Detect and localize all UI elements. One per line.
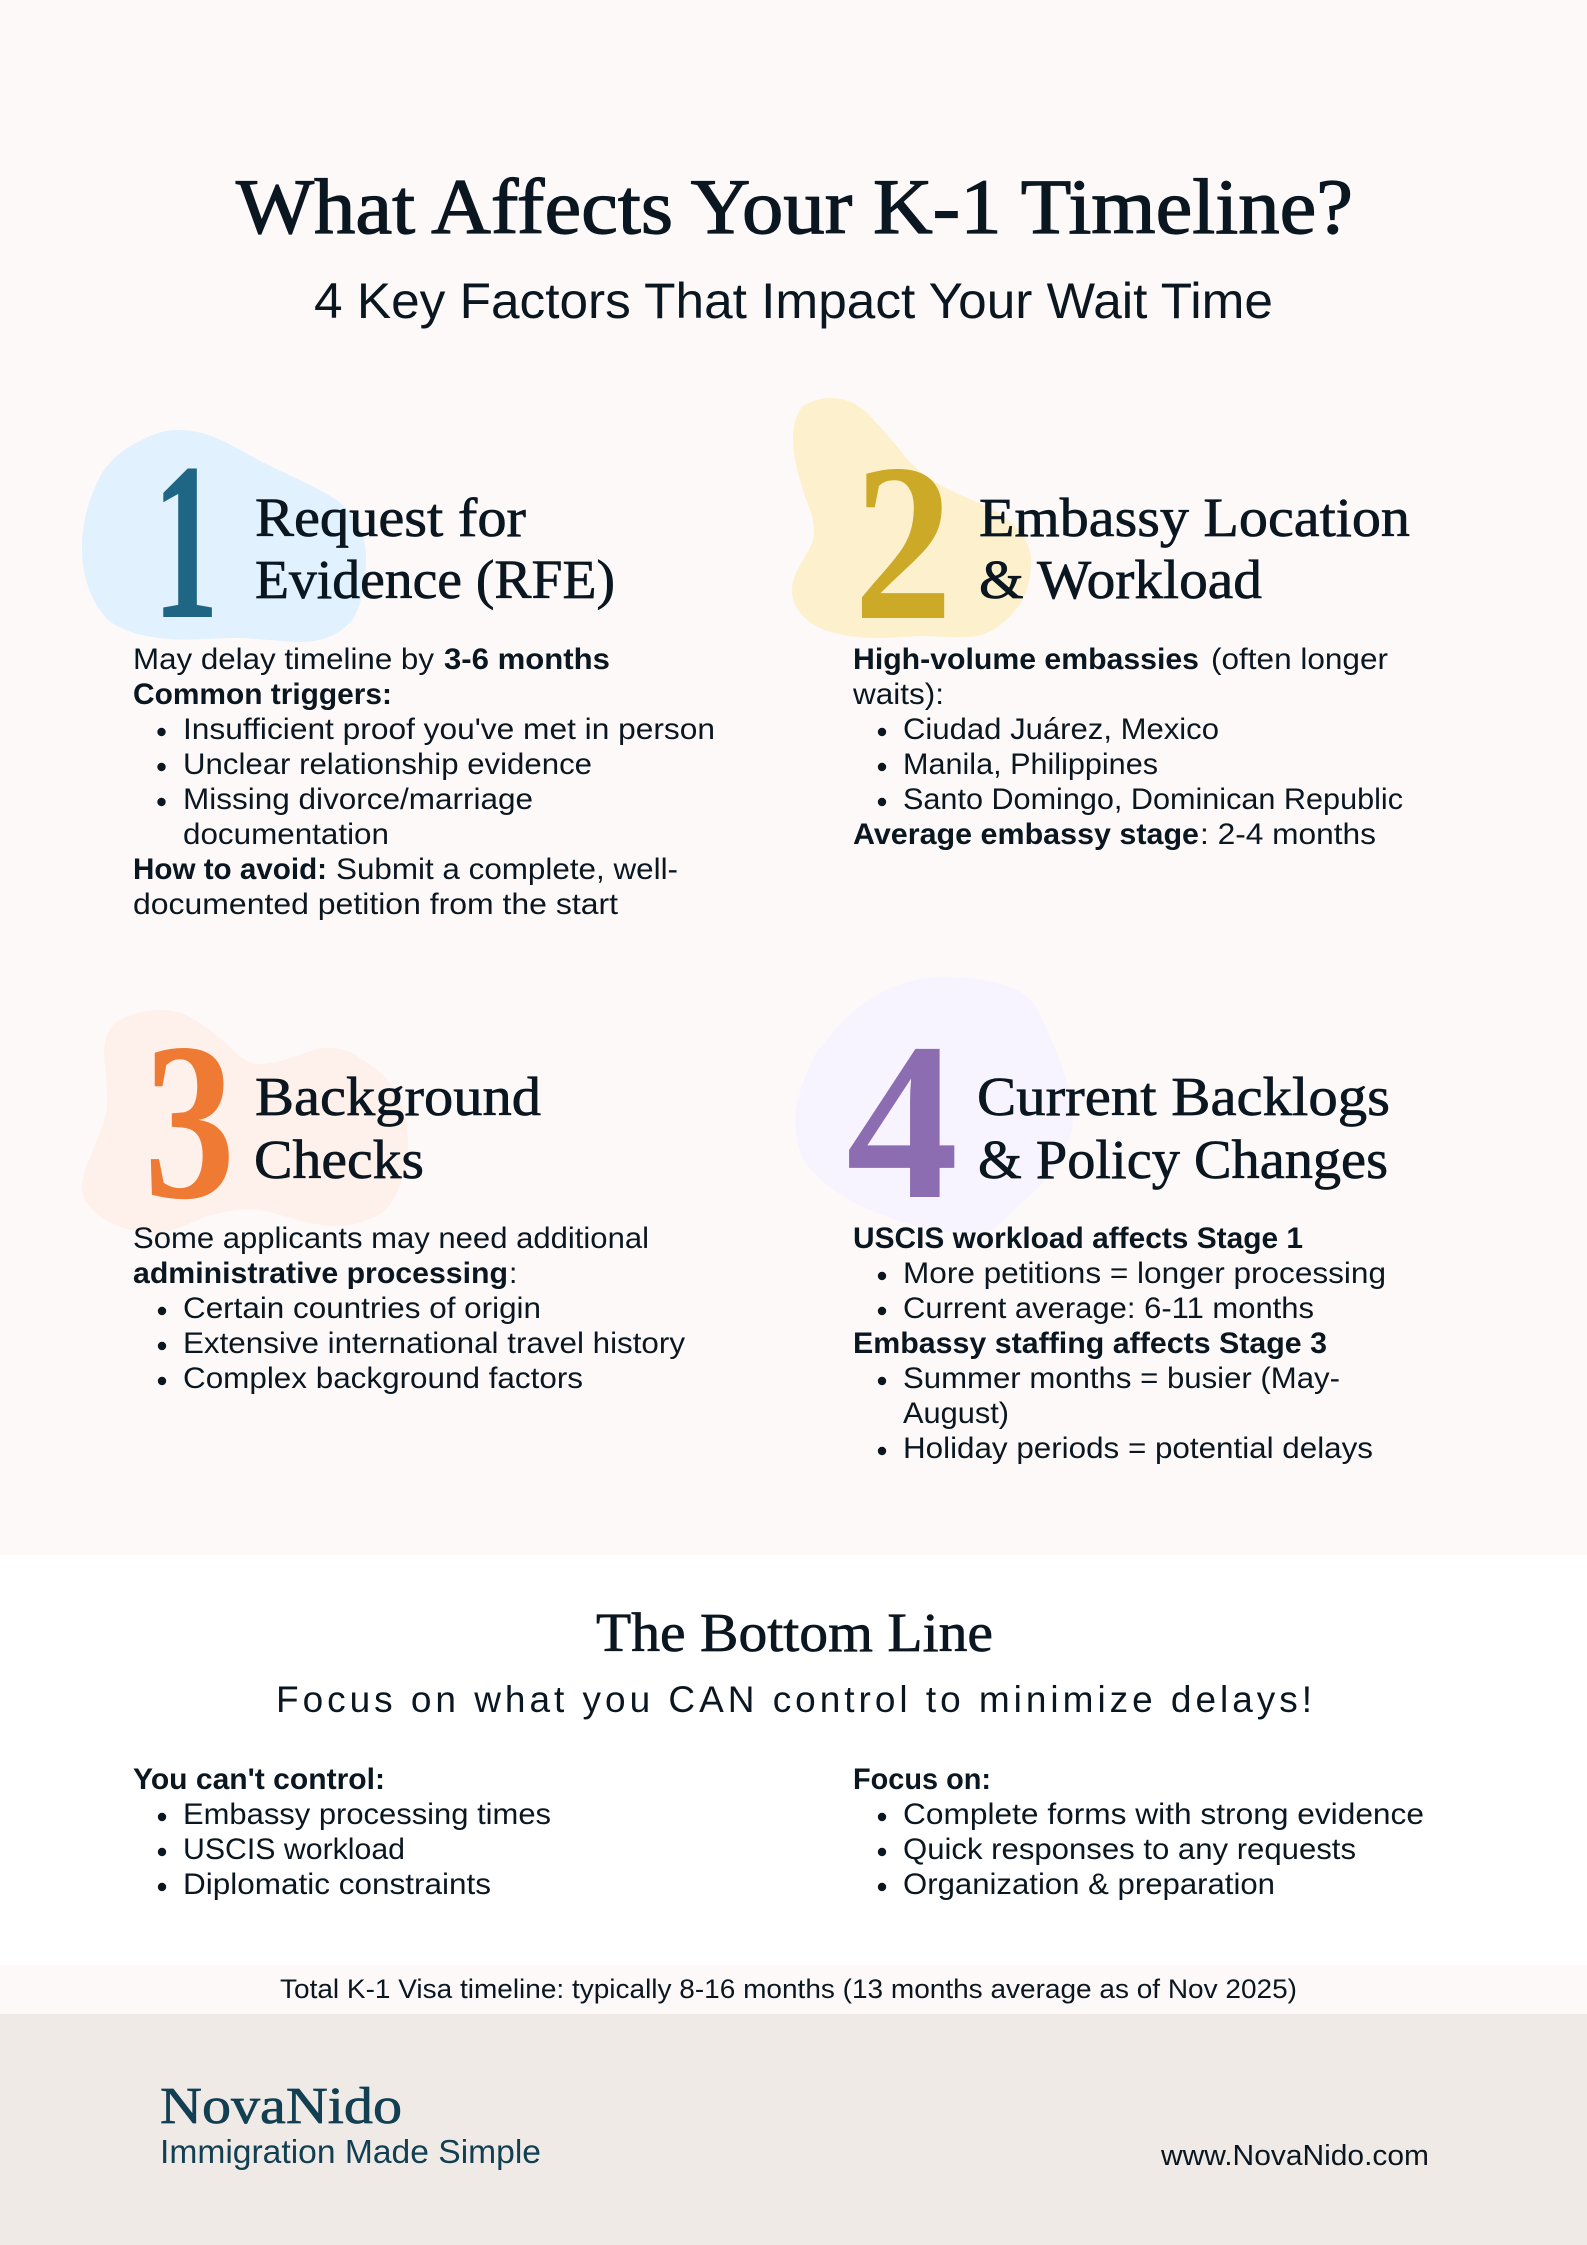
- text block: factor 2 details: : 2-4 months: [1200, 818, 1376, 851]
- heading: Current Backlogs & Policy Changes: & Policy Changes: [978, 1129, 1388, 1190]
- title: What Affects Your K-1 Timeline?: [236, 163, 1353, 250]
- list: focus on: Focus on:: [853, 1763, 991, 1796]
- list: focus on: Quick responses to any requests: [903, 1833, 1356, 1866]
- text block: factor 4 details: Current average: 6-11 months: [903, 1292, 1314, 1325]
- heading: Background Checks: [254, 1066, 541, 1190]
- text block: factor 4 details: Summer months = busier (May-: [903, 1362, 1340, 1395]
- list: focus on: [853, 1763, 1424, 1901]
- text block: factor 2 details: Manila, Philippines: [903, 748, 1158, 781]
- text block: factor 4 details: August): [903, 1397, 1009, 1430]
- number 2: 2: [854, 417, 953, 667]
- panel: the bottom line: [0, 1555, 1587, 1965]
- list: you can't control: USCIS workload: [183, 1833, 405, 1866]
- website: www.NovaNido.com: [1160, 2140, 1429, 2172]
- text block: factor 1 details: Missing divorce/marriage: [183, 783, 533, 816]
- list: you can't control: You can't control:: [133, 1763, 385, 1796]
- text block: factor 1 details: Submit a complete, well-: [336, 853, 678, 886]
- text block: factor 4 details: More petitions = longer processing: [903, 1257, 1386, 1290]
- text block: factor 4 details: [853, 1222, 1386, 1465]
- number 1: 1: [153, 416, 219, 666]
- logo: NovaNido: NovaNido: [160, 2078, 402, 2135]
- text block: factor 4 details: USCIS workload affects Stage 1: [853, 1222, 1303, 1255]
- text block: factor 2 details: Ciudad Juárez, Mexico: [903, 713, 1219, 746]
- text block: factor 3 details: :: [509, 1257, 517, 1290]
- text block: factor 1 details: Common triggers:: [133, 678, 392, 711]
- text block: factor 2 details: (often longer: [1211, 643, 1388, 676]
- text block: factor 1 details: [133, 643, 715, 921]
- text block: factor 2 details: High-volume embassies: [853, 643, 1199, 676]
- heading: Background Checks: Background: [255, 1066, 541, 1127]
- text block: factor 2 details: waits):: [852, 678, 944, 711]
- heading: Current Backlogs & Policy Changes: [977, 1066, 1390, 1190]
- heading: Request for Evidence (RFE): [255, 487, 615, 610]
- number 3: 3: [144, 996, 235, 1246]
- text block: factor 3 details: administrative processing: [133, 1257, 508, 1290]
- text block: factor 3 details: Extensive international travel history: [183, 1327, 685, 1360]
- text block: factor 2 details: [852, 643, 1403, 851]
- text block: factor 3 details: Complex background factors: [183, 1362, 583, 1395]
- text block: factor 1 details: Insufficient proof you've met in person: [183, 713, 715, 746]
- list: you can't control: Diplomatic constraints: [183, 1868, 491, 1901]
- text block: factor 4 details: Holiday periods = potential delays: [903, 1432, 1373, 1465]
- heading: Embassy Location & Workload: & Workload: [979, 549, 1262, 610]
- text block: factor 1 details: May delay timeline by: [133, 643, 434, 676]
- text block: factor 2 details: Average embassy stage: [853, 818, 1199, 851]
- panel: factor 2 embassy location: [792, 398, 1410, 851]
- heading: Current Backlogs & Policy Changes: Current Backlogs: [977, 1066, 1390, 1127]
- list: focus on: Organization & preparation: [903, 1868, 1275, 1901]
- heading: Embassy Location & Workload: Embassy Location: [979, 487, 1410, 548]
- list: you can't control: [133, 1763, 551, 1901]
- text block: factor 3 details: Some applicants may need additional: [133, 1222, 649, 1255]
- text block: factor 1 details: documented petition from the start: [133, 888, 619, 921]
- text block: factor 1 details: How to avoid:: [133, 853, 327, 886]
- blob: factor 2 background: [792, 398, 1031, 638]
- panel: factor 4 backlogs and policy: [795, 977, 1390, 1465]
- text block: factor 1 details: 3-6 months: [444, 643, 610, 676]
- number 4: 4: [846, 996, 958, 1246]
- text block: factor 3 details: [133, 1222, 685, 1395]
- text block: factor 2 details: Santo Domingo, Dominican Republic: [903, 783, 1403, 816]
- panel: factor 1 request for evidence: [82, 416, 715, 921]
- subtitle: 4 Key Factors That Impact Your Wait Time: [314, 273, 1273, 329]
- heading: The Bottom Line: The Bottom Line: [596, 1602, 993, 1663]
- tagline: Immigration Made Simple: [160, 2133, 541, 2170]
- heading: Background Checks: Checks: [254, 1129, 424, 1190]
- footer band: [0, 2014, 1587, 2245]
- total timeline note: Total K-1 Visa timeline: typically 8-16 months (13 months average as of Nov 2025): [280, 1974, 1297, 2004]
- blob: factor 1 background: [82, 430, 366, 642]
- text block: factor 1 details: documentation: [183, 818, 389, 851]
- text block: factor 4 details: Embassy staffing affects Stage 3: [853, 1327, 1327, 1360]
- list: you can't control: Embassy processing times: [183, 1798, 551, 1831]
- heading: Embassy Location & Workload: [979, 487, 1410, 610]
- blob: factor 4 background: [795, 977, 1073, 1232]
- panel: factor 3 background checks: [82, 996, 685, 1395]
- heading: Request for Evidence (RFE): Request for: [255, 487, 526, 548]
- list: focus on: Complete forms with strong evidence: [903, 1798, 1424, 1831]
- text block: factor 3 details: Certain countries of origin: [183, 1292, 541, 1325]
- heading: Request for Evidence (RFE): Evidence (RFE): [255, 549, 615, 610]
- blob: factor 3 background: [82, 1010, 408, 1233]
- text block: factor 1 details: Unclear relationship evidence: [183, 748, 592, 781]
- subheading: focus message: Focus on what you CAN control to minimize delays!: [276, 1679, 1312, 1720]
